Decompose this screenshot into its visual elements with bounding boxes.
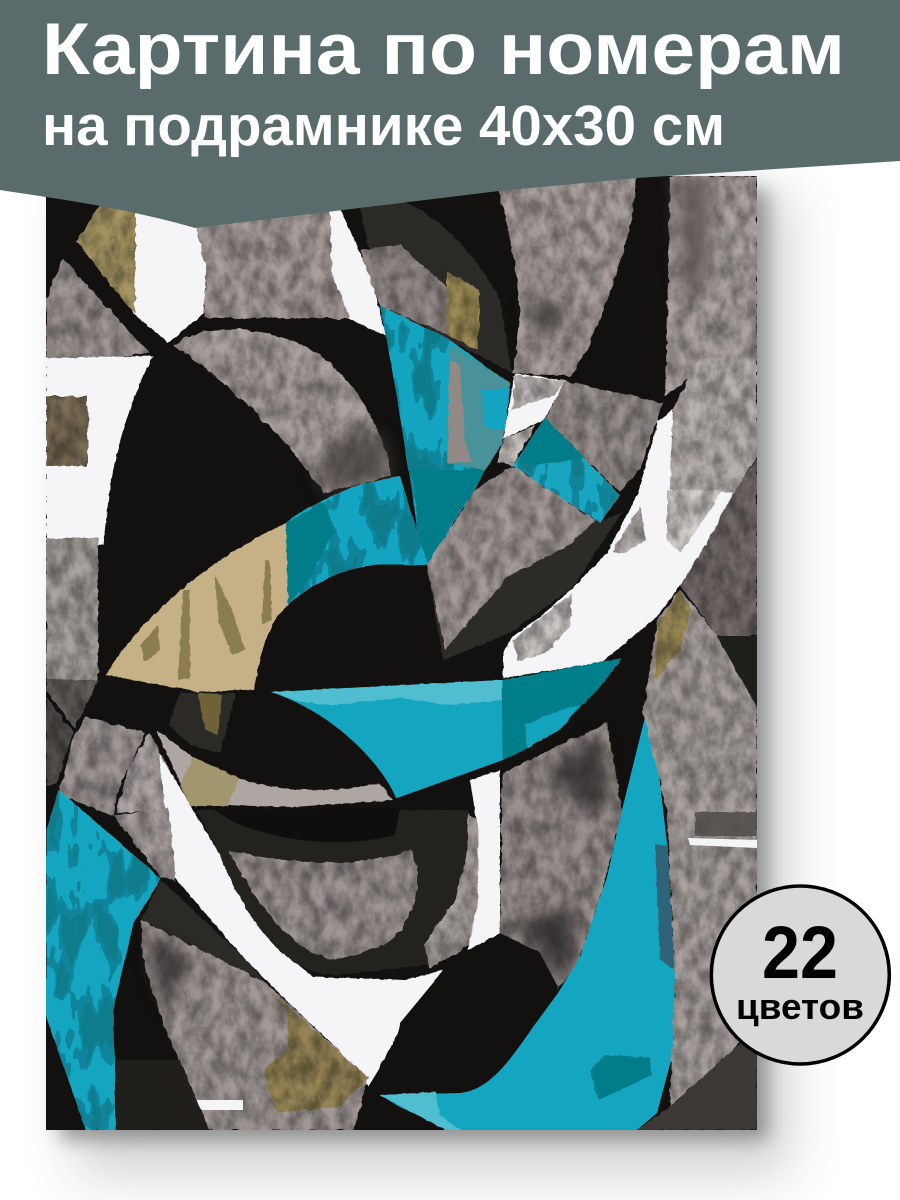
- upper white curve: [329, 210, 386, 336]
- right center gray bowl: [500, 723, 622, 990]
- olive on right column: [655, 590, 692, 680]
- black ground: [46, 176, 757, 1130]
- center dark gray: [427, 466, 622, 660]
- olive patch: [263, 987, 368, 1113]
- teal arc dark left: [286, 502, 335, 605]
- small white dash: [196, 1100, 243, 1110]
- olive in dark blob: [198, 693, 222, 735]
- center bowl: [228, 850, 418, 960]
- gray strip by white diagonal: [113, 808, 176, 882]
- streak two: [215, 575, 245, 655]
- bottom black corner: [116, 1060, 209, 1130]
- black triangle right: [717, 636, 757, 707]
- gray over swoosh left: [612, 505, 646, 553]
- light teal sliver: [380, 1092, 460, 1130]
- left lower gray block: [46, 538, 98, 680]
- tan part of band: [180, 757, 239, 806]
- teal dark edge: [655, 845, 675, 970]
- right gray mid: [545, 381, 663, 493]
- big teal shape: [380, 717, 675, 1130]
- teal bowl: [271, 680, 503, 798]
- gray dome: [174, 329, 391, 493]
- title: Картина по номерам: [42, 9, 845, 90]
- gray over swoosh bottom: [512, 592, 573, 660]
- column dark strip: [674, 176, 712, 300]
- white line right: [688, 838, 757, 848]
- badge number: 22: [762, 911, 838, 994]
- center bowl dark lower: [510, 905, 575, 980]
- badge label: цветов: [736, 986, 864, 1027]
- streak four: [140, 625, 160, 662]
- small gray over white: [512, 375, 565, 410]
- white swoosh: [503, 409, 733, 678]
- gray triangle by white diagonal: [116, 733, 193, 812]
- gray over swoosh right: [667, 490, 722, 553]
- small teal diamond: [513, 418, 620, 523]
- white diagonal: [159, 753, 443, 1087]
- fan dark lower: [413, 470, 485, 565]
- canvas tight shadow: [60, 190, 768, 1140]
- colour count badge: [711, 886, 889, 1064]
- blob gray core: [360, 245, 450, 335]
- fan teal-gray panel: [447, 345, 510, 470]
- gray strip below white: [497, 425, 535, 466]
- upper gray crescent: [498, 175, 637, 376]
- right upper dark gray: [680, 458, 757, 636]
- band under bowl: [156, 730, 393, 807]
- crescent dark blot: [525, 300, 568, 338]
- teal diamond dark part: [518, 418, 585, 465]
- dome dark foot: [315, 430, 392, 493]
- teal fan: [380, 305, 510, 565]
- upper left gray band: [193, 205, 350, 318]
- far left dark gray: [46, 697, 73, 785]
- upper dark brown blob: [360, 200, 512, 373]
- mid left gray: [59, 717, 146, 815]
- dark band by diagonal: [141, 880, 266, 983]
- teal bowl light top: [271, 680, 502, 705]
- white vertical: [468, 770, 500, 950]
- blob olive patch: [447, 272, 480, 350]
- upper right gray column: [665, 176, 757, 396]
- painting: [46, 175, 757, 1130]
- fan gray strip: [447, 360, 472, 463]
- teal dark stain: [590, 1055, 652, 1100]
- right gray column: [643, 590, 757, 1107]
- dark blob under sail: [169, 693, 236, 753]
- lower left dark wedge: [46, 678, 98, 728]
- black upper ring: [215, 808, 400, 842]
- mid right dark band: [695, 812, 757, 836]
- left dark patch: [46, 396, 88, 466]
- bright patch in bowl right: [525, 705, 580, 748]
- teal bowl right part: [502, 658, 622, 760]
- left gray shape: [46, 259, 149, 362]
- black blob: [368, 933, 558, 1093]
- header banner: [0, 0, 900, 228]
- tan sail streaks: [140, 560, 272, 680]
- small white piece: [503, 373, 565, 439]
- bottom left gray: [141, 920, 368, 1130]
- bottom right dark: [637, 1030, 757, 1130]
- upper left white shape: [132, 213, 206, 343]
- left white block: [46, 356, 153, 545]
- streak one: [178, 590, 190, 680]
- tan sail: [106, 523, 288, 692]
- gray beside white vertical: [424, 812, 482, 968]
- fan bright patch: [482, 388, 510, 430]
- badge circle: [711, 886, 889, 1064]
- right gray patch: [668, 358, 757, 500]
- tan corner shape: [77, 200, 135, 314]
- bottom left dark shoulder: [150, 935, 190, 1010]
- streak three: [262, 560, 272, 625]
- center gray: [427, 466, 595, 650]
- teal arc: [286, 476, 427, 605]
- canvas wide shadow: [75, 190, 790, 1175]
- subtitle: на подрамнике 40х30 см: [42, 94, 725, 158]
- center bowl dark upper: [545, 735, 612, 815]
- teal left: [46, 790, 161, 1130]
- dark ring: [196, 810, 470, 975]
